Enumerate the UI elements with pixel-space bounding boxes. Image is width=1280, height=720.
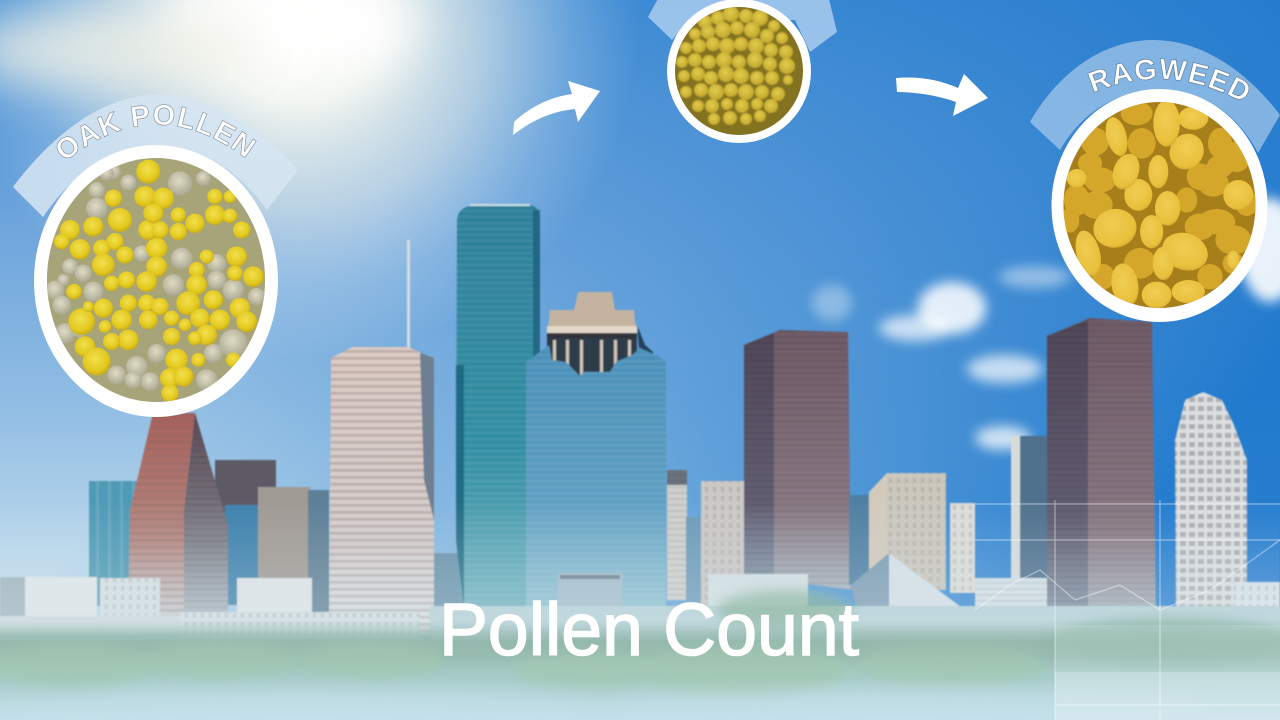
banner: oak pollen xyxy=(13,95,298,217)
pale tower with antenna xyxy=(329,240,434,635)
callout: middle pollen xyxy=(648,0,837,143)
clouds xyxy=(812,198,1280,450)
far right buildings xyxy=(849,436,1055,645)
banner: ragweed: RAGWEED xyxy=(1087,58,1250,100)
background buildings left xyxy=(89,460,464,617)
pollen circle: middle xyxy=(667,0,811,143)
sun glare xyxy=(0,0,660,360)
city skyline xyxy=(0,204,1280,646)
faint chart overlay xyxy=(975,500,1280,720)
dark right tower xyxy=(1047,318,1156,620)
crowned glass tower xyxy=(526,292,666,618)
dark brown tower xyxy=(744,330,851,590)
callout: oak pollen xyxy=(13,95,298,417)
callout: ragweed xyxy=(1030,40,1280,322)
banner: oak pollen: OAK POLLEN xyxy=(56,104,257,158)
teal tall tower xyxy=(456,204,540,612)
white crowned tower xyxy=(1175,392,1280,632)
mid right buildings xyxy=(667,470,745,607)
title: Pollen Count xyxy=(439,588,859,671)
low haze band behind the title xyxy=(430,606,1280,646)
arrow: middle to ragweed xyxy=(896,74,988,116)
pollen circle: oak xyxy=(34,145,278,417)
red triangular tower xyxy=(128,413,228,625)
banner: middle pollen xyxy=(648,0,837,52)
tree line xyxy=(0,590,1280,720)
banner: ragweed xyxy=(1030,40,1280,184)
arrow: oak to middle xyxy=(513,81,600,135)
low white block xyxy=(708,574,808,619)
pollen circle: ragweed xyxy=(1052,89,1268,322)
low city blocks left xyxy=(0,577,420,638)
hazy base xyxy=(0,500,1280,640)
